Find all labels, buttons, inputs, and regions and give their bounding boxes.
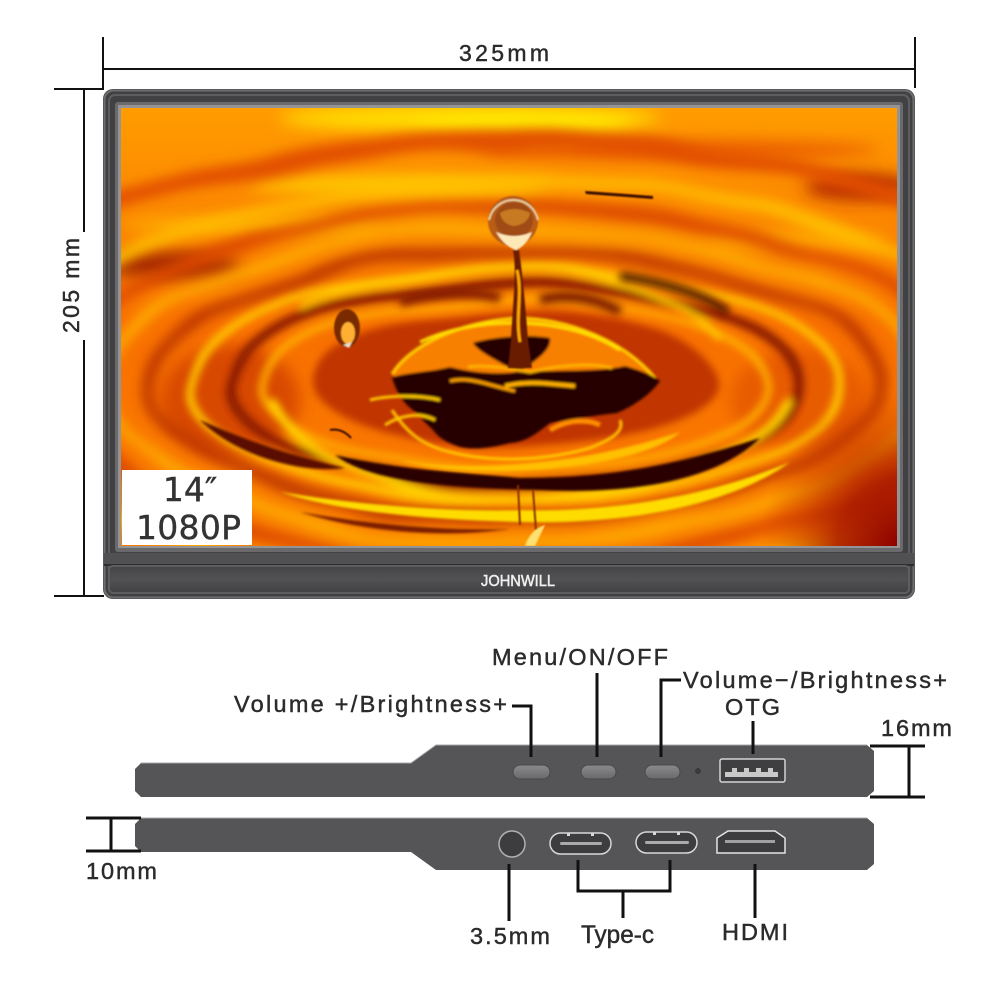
spec label: 14 inch 1080P: 14″	[163, 470, 217, 509]
label: OTG with leader: OTG	[725, 694, 780, 720]
OTG USB port	[720, 759, 785, 782]
menu button	[581, 765, 616, 779]
dimension: height 205mm	[54, 89, 104, 596]
volume plus button	[513, 765, 550, 779]
monitor front	[103, 89, 915, 599]
large droplet	[488, 196, 538, 246]
side view: top edge	[135, 745, 874, 797]
dark streak	[585, 191, 653, 199]
brand: JOHNWILL: JOHNWILL	[481, 573, 555, 590]
bottom dark ring	[335, 438, 760, 491]
bottom-right dark red corner	[768, 404, 897, 546]
monitor bezel	[103, 89, 915, 599]
label: Menu/ON/OFF with leader: Menu/ON/OFF	[492, 644, 668, 670]
label: Type-c with bracket: Type-c	[581, 921, 654, 949]
audio jack 3.5mm	[499, 831, 525, 857]
small droplet	[334, 309, 360, 347]
HDMI port	[717, 831, 785, 853]
label: 3.5mm with leader	[470, 864, 550, 949]
dimension: 10mm: 10mm	[86, 858, 157, 884]
droplet stem	[508, 250, 532, 368]
label: HDMI with leader: HDMI	[722, 919, 788, 945]
spec label: 14 inch 1080P: 1080P	[136, 508, 241, 547]
orange dome	[392, 318, 650, 379]
bottom chin bar	[104, 553, 914, 593]
label: Volume +/Brightness+ with leader	[234, 691, 531, 757]
central dark pool	[392, 366, 660, 448]
label: OTG with leader	[725, 694, 780, 754]
dimension: 10mm	[86, 818, 157, 884]
label: Type-c with bracket	[578, 860, 670, 949]
dimension: width 325mm: 325mm	[459, 40, 549, 66]
small ripple mark	[330, 430, 351, 438]
label: Volume-/Brightness+ with leader: Volume−/Brightness+	[683, 667, 947, 693]
label: HDMI with leader	[722, 864, 788, 945]
dimension: 16mm	[870, 715, 952, 797]
label: 3.5mm with leader: 3.5mm	[470, 923, 550, 949]
screen image: water droplet	[121, 108, 897, 546]
side view: bottom edge	[135, 818, 874, 870]
label: Volume +/Brightness+ with leader: Volume +/Brightness+	[234, 691, 507, 717]
reflected stem	[518, 485, 536, 530]
USB Type-C port 1	[550, 833, 611, 854]
dimension: 16mm: 16mm	[881, 715, 952, 741]
label: Volume-/Brightness+ with leader	[661, 667, 947, 757]
USB Type-C port 2	[636, 832, 697, 853]
dimension: width 325mm	[103, 37, 915, 88]
volume minus button	[645, 765, 680, 779]
indicator light	[695, 768, 701, 774]
spec label: 14 inch 1080P	[122, 470, 252, 547]
dimension: height 205mm: 205 mm	[58, 238, 84, 333]
